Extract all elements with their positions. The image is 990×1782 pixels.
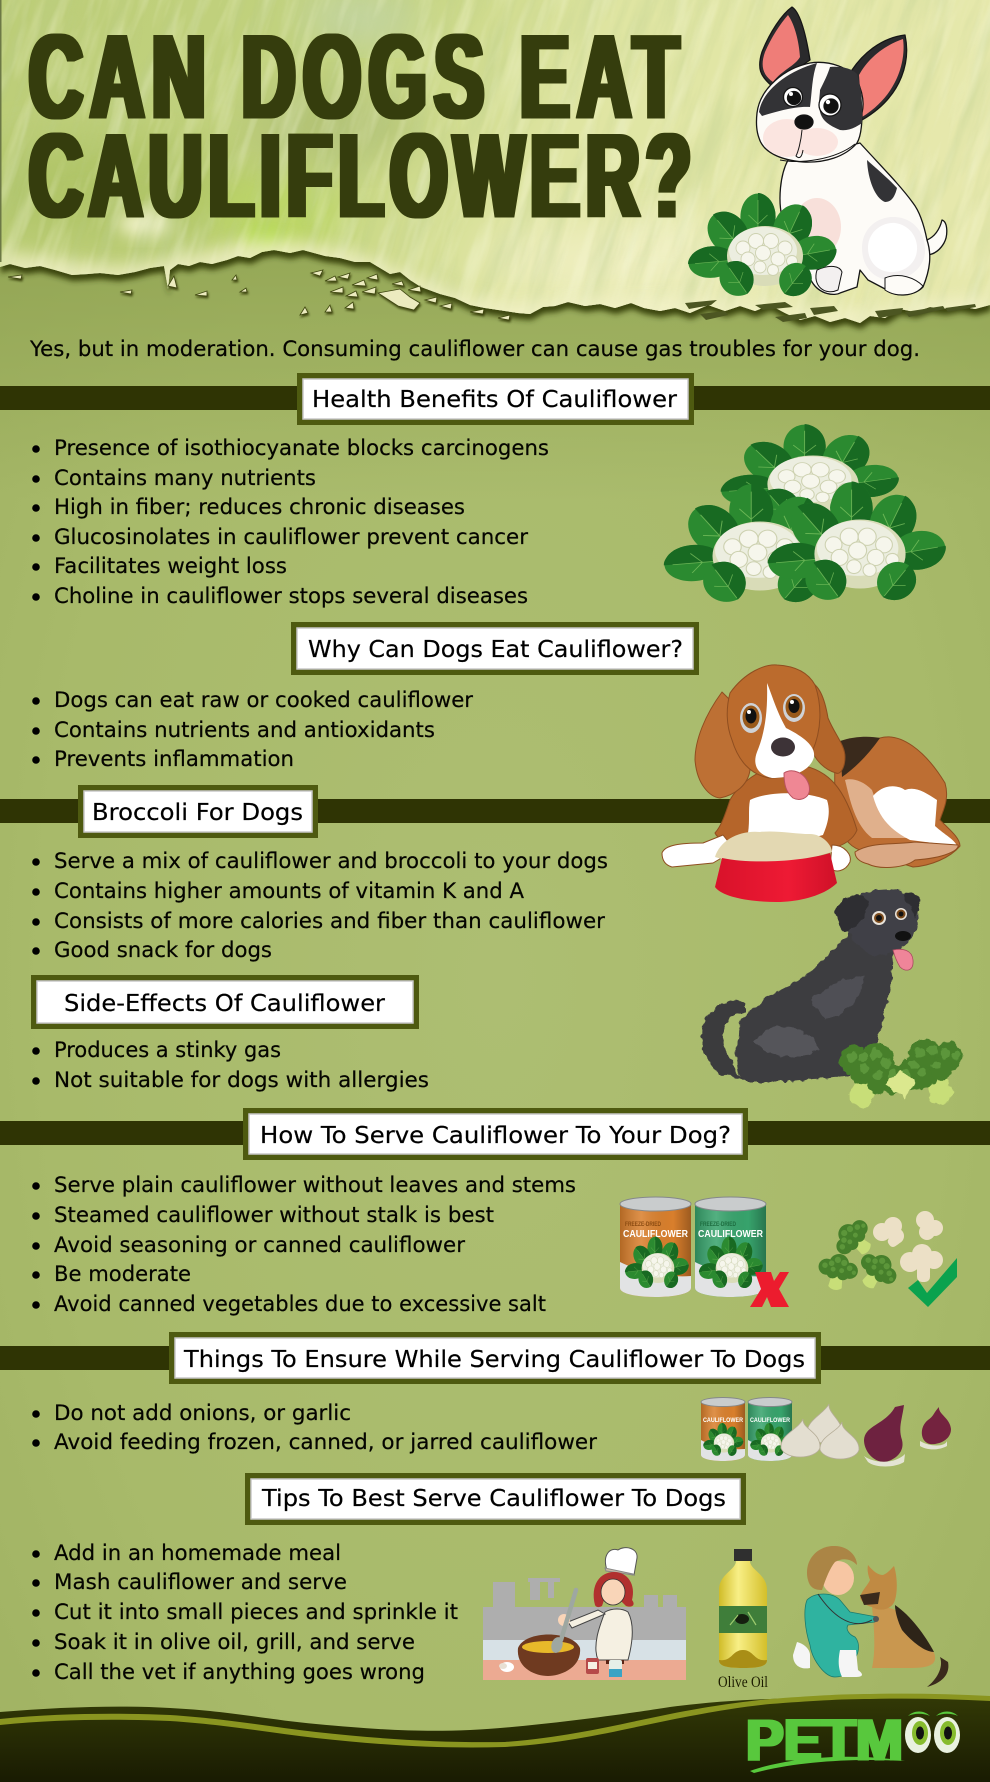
footer wave xyxy=(0,1694,990,1782)
list: why can dogs eat: Contains nutrients and antioxidants xyxy=(54,718,435,743)
list: things to ensure: Do not add onions, or garlic xyxy=(54,1401,351,1426)
list: how to serve: Avoid seasoning or canned cauliflower xyxy=(54,1233,465,1258)
section: things to ensure xyxy=(32,1332,951,1466)
list: things to ensure: Avoid feeding frozen, canned, or jarred cauliflower xyxy=(54,1430,597,1455)
title: CAN DOGS EAT xyxy=(29,11,679,144)
illustration: three cauliflowers xyxy=(662,424,949,610)
illustration: fresh vegetables with check mark xyxy=(815,1211,957,1307)
illustration: olive oil bottle xyxy=(718,1549,768,1691)
list: tips: Mash cauliflower and serve xyxy=(54,1570,347,1595)
list: health benefits: Choline in cauliflower stops several diseases xyxy=(54,584,528,609)
list: broccoli: Consists of more calories and fiber than cauliflower xyxy=(54,909,605,934)
illustration: canned cauliflower with x mark: FREEZE-DRIED xyxy=(700,1222,737,1228)
torn paper flecks xyxy=(8,270,510,320)
illustration: french bulldog xyxy=(756,7,947,295)
heading: why can dogs eat: Why Can Dogs Eat Cauliflower? xyxy=(308,635,683,663)
illustration: cans, garlic and onions xyxy=(701,1398,951,1466)
list: side effects: Produces a stinky gas xyxy=(54,1038,281,1063)
section: broccoli for dogs xyxy=(32,785,608,963)
header torn paper background xyxy=(0,0,990,332)
list: broccoli: Serve a mix of cauliflower and broccoli to your dogs xyxy=(54,849,608,874)
dark flecks at torn edge xyxy=(685,300,976,322)
list: how to serve: Avoid canned vegetables due to excessive salt xyxy=(54,1292,546,1317)
list: why can dogs eat: Dogs can eat raw or cooked cauliflower xyxy=(54,688,473,713)
illustration: cans, garlic and onions: CAULIFLOWER xyxy=(703,1417,743,1424)
heading: why can dogs eat xyxy=(291,622,699,675)
list: how to serve: Steamed cauliflower without stalk is best xyxy=(54,1203,494,1228)
heading: health benefits xyxy=(297,373,694,425)
title: CAULIFLOWER? xyxy=(29,110,691,243)
heading: health benefits: Health Benefits Of Cauliflower xyxy=(312,385,677,413)
list: broccoli: Contains higher amounts of vitamin K and A xyxy=(54,879,524,904)
heading: side effects xyxy=(31,975,419,1029)
list: health benefits: Contains many nutrients xyxy=(54,466,316,491)
illustration: chef mixing in kitchen xyxy=(483,1548,686,1680)
list: health benefits: High in fiber; reduces chronic diseases xyxy=(54,495,465,520)
illustration: beagle with bowl xyxy=(662,665,960,902)
logo: petmoo: PETM xyxy=(746,1708,903,1773)
heading: broccoli: Broccoli For Dogs xyxy=(92,798,303,826)
section: side effects xyxy=(31,889,977,1121)
heading: tips xyxy=(245,1473,746,1525)
list: why can dogs eat xyxy=(32,688,473,772)
list: side effects xyxy=(32,1038,429,1093)
illustration: cauliflower beside bulldog xyxy=(687,193,839,303)
list: tips: Cut it into small pieces and sprinkle it xyxy=(54,1600,458,1625)
heading: things to ensure: Things To Ensure While Serving Cauliflower To Dogs xyxy=(183,1345,805,1373)
illustration: canned cauliflower with x mark: CAULIFLOWER xyxy=(698,1228,763,1240)
heading: how to serve xyxy=(243,1108,748,1160)
list: tips: Soak it in olive oil, grill, and serve xyxy=(54,1630,415,1655)
list: why can dogs eat: Prevents inflammation xyxy=(54,747,294,772)
intro sentence: Yes, but in moderation. Consuming cauliflower can cause gas troubles for your dog. xyxy=(29,337,920,362)
section: why can dogs eat cauliflower xyxy=(32,622,699,772)
illustration: cans, garlic and onions: CAULIFLOWER xyxy=(750,1417,790,1424)
list: tips: Call the vet if anything goes wrong xyxy=(54,1660,425,1685)
list: how to serve xyxy=(32,1173,576,1317)
list: tips: Add in an homemade meal xyxy=(54,1541,341,1566)
list: how to serve: Serve plain cauliflower without leaves and stems xyxy=(54,1173,576,1198)
list: health benefits: Glucosinolates in cauliflower prevent cancer xyxy=(54,525,528,550)
heading: tips: Tips To Best Serve Cauliflower To Dogs xyxy=(261,1484,726,1512)
list: how to serve: Be moderate xyxy=(54,1262,191,1287)
illustration: black dog with broccoli xyxy=(702,889,977,1121)
list: broccoli xyxy=(32,849,608,963)
heading: side effects: Side-Effects Of Cauliflower xyxy=(64,989,385,1017)
section: tips to best serve xyxy=(32,1473,948,1691)
list: things to ensure xyxy=(32,1401,597,1455)
list: health benefits: Presence of isothiocyanate blocks carcinogens xyxy=(54,436,549,461)
list: side effects: Not suitable for dogs with allergies xyxy=(54,1068,429,1093)
title xyxy=(29,11,691,243)
heading: how to serve: How To Serve Cauliflower To Your Dog? xyxy=(260,1121,731,1149)
list: broccoli: Good snack for dogs xyxy=(54,938,272,963)
list: tips xyxy=(32,1541,458,1685)
heading: things to ensure xyxy=(169,1332,821,1384)
section: health benefits xyxy=(32,373,949,610)
heading: broccoli xyxy=(78,785,318,838)
illustration: canned cauliflower with x mark: CAULIFLOWER xyxy=(623,1228,688,1240)
section: how to serve xyxy=(32,1108,957,1317)
list: health benefits xyxy=(32,436,549,609)
illustration: canned cauliflower with x mark xyxy=(620,1197,789,1307)
illustration: vet with german shepherd xyxy=(793,1546,948,1687)
illustration: canned cauliflower with x mark: FREEZE-DRIED xyxy=(625,1222,662,1228)
caption: olive oil: Olive Oil xyxy=(718,1674,768,1691)
list: health benefits: Facilitates weight loss xyxy=(54,554,287,579)
